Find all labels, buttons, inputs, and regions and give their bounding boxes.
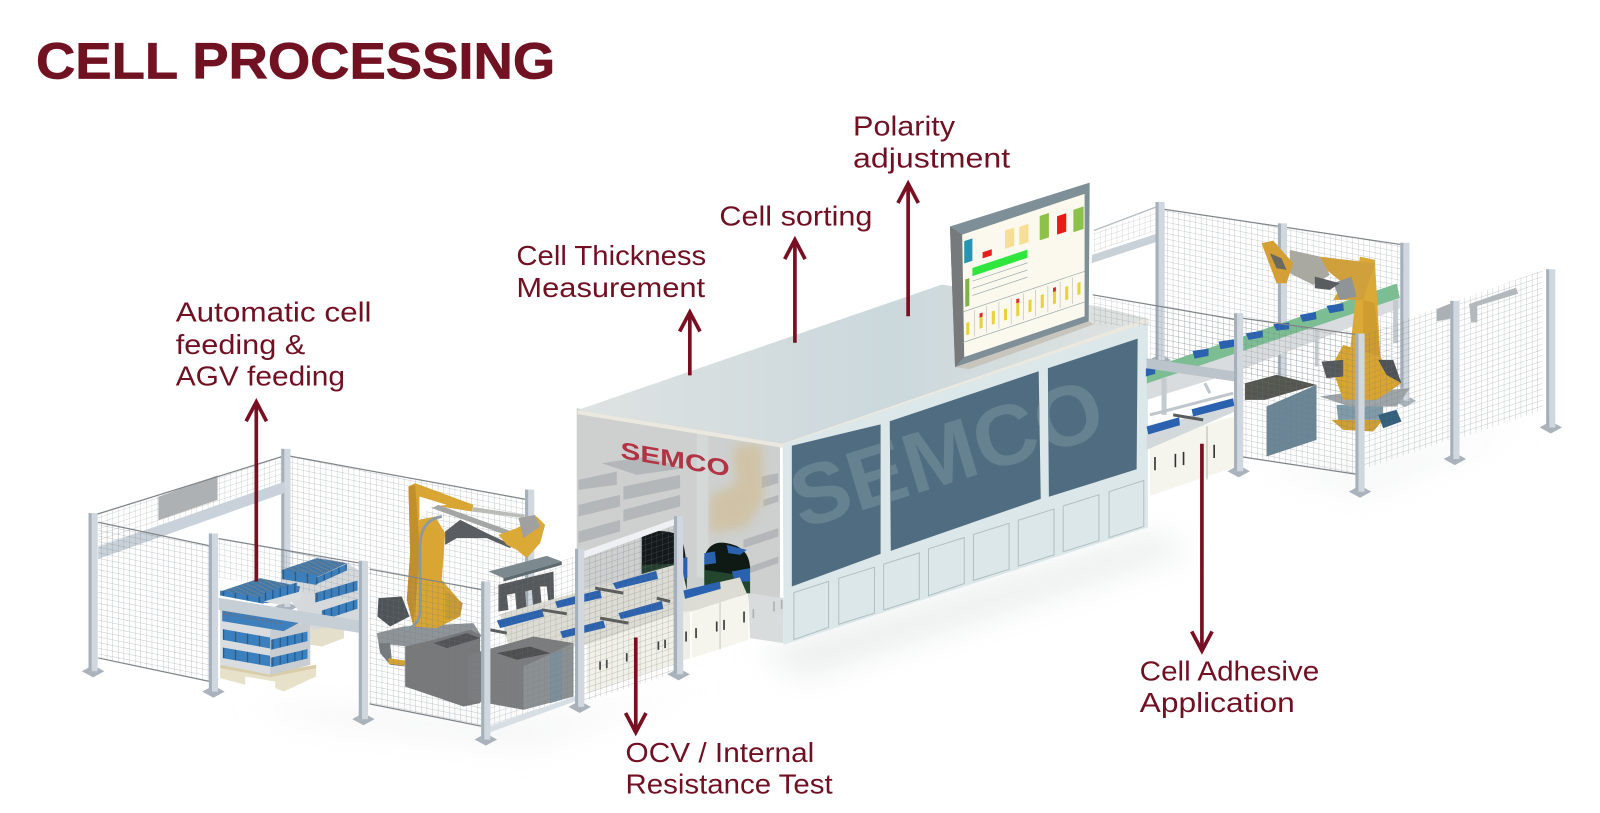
arrow: polarity xyxy=(898,184,918,316)
gray bin right xyxy=(1245,375,1317,457)
label: polarity adjustment: Polarity xyxy=(853,111,955,142)
rear stack xyxy=(282,558,358,630)
arrow: automatic cell feeding xyxy=(246,402,267,581)
machine enclosure xyxy=(577,285,1150,645)
conveyor legs xyxy=(1162,378,1167,415)
arrow: cell sorting xyxy=(785,240,805,343)
end face reflections xyxy=(578,457,778,573)
label: OCV internal resistance test: Resistance Test xyxy=(626,769,833,800)
arrow: cell thickness xyxy=(680,312,700,375)
fence panel: left side xyxy=(98,522,209,681)
arrow: adhesive xyxy=(1192,444,1212,651)
cell clusters xyxy=(497,571,663,638)
robot 1 wrist xyxy=(498,517,545,558)
fence panel: left front with cross beam xyxy=(219,539,363,633)
front stack upper tier xyxy=(220,578,300,603)
right lane cells xyxy=(683,581,721,599)
front stack body xyxy=(220,607,310,675)
label: cell sorting: Cell sorting xyxy=(719,200,872,231)
title: CELL PROCESSING xyxy=(36,33,555,90)
robot 2 upper arm xyxy=(1320,257,1375,300)
fence panels: left front right xyxy=(370,518,677,732)
SEMCO logo on end face: SEMCO xyxy=(620,438,730,483)
label: polarity adjustment xyxy=(853,111,1011,173)
label: cell adhesive application: Application xyxy=(1140,687,1295,718)
robot 2 wrist xyxy=(1262,241,1293,283)
machine end face xyxy=(577,408,783,643)
label: automatic cell feeding xyxy=(176,296,372,392)
label: OCV internal resistance test: OCV / Internal xyxy=(626,737,814,768)
robot 2 base xyxy=(1332,345,1401,400)
robot 1 xyxy=(377,483,562,666)
label: cell adhesive application xyxy=(1140,655,1319,718)
left cell posts xyxy=(82,513,690,746)
label: cell thickness measurement xyxy=(516,240,706,303)
right cell posts xyxy=(1227,269,1562,498)
pallet stacks xyxy=(220,558,358,691)
arches xyxy=(642,531,687,600)
right front fences xyxy=(1243,270,1543,474)
label: cell thickness measurement: Cell Thickness xyxy=(516,240,706,271)
robot 1 motor xyxy=(377,596,409,626)
robot 2 xyxy=(1262,241,1410,432)
green conveyor xyxy=(1146,284,1400,415)
rear pallet xyxy=(309,621,344,646)
robot 2 tower xyxy=(1350,257,1381,360)
lower panels xyxy=(794,480,1144,640)
machine long face xyxy=(783,322,1148,645)
robot 2 pedestal xyxy=(1332,420,1383,432)
label: automatic cell feeding: AGV feeding xyxy=(176,361,345,392)
floor shadows xyxy=(245,428,1530,750)
robot 2 forearm xyxy=(1290,250,1330,285)
label: automatic cell feeding: Automatic cell xyxy=(176,296,372,327)
machine base box xyxy=(748,593,783,643)
conveyor surface xyxy=(500,563,747,653)
arrow: OCV test xyxy=(626,638,646,732)
label: cell thickness measurement: Measurement xyxy=(516,272,706,303)
machine top face xyxy=(578,285,1148,444)
label: automatic cell feeding: feeding & xyxy=(176,329,305,360)
label: polarity adjustment: adjustment xyxy=(853,142,1011,173)
label: cell adhesive application: Cell Adhesive xyxy=(1140,655,1319,686)
gray bins xyxy=(405,630,573,710)
right cabinets xyxy=(692,593,748,658)
conveyor cabinets, left part xyxy=(587,611,685,694)
robot 1 body xyxy=(407,483,473,628)
left cabinet handles xyxy=(600,640,665,670)
left cell: back fences xyxy=(94,449,541,654)
monitor xyxy=(950,183,1094,369)
monitor stand xyxy=(955,321,1094,369)
screen xyxy=(962,194,1085,357)
robot 1 links xyxy=(472,507,525,518)
SEMCO window watermark: SEMCO xyxy=(779,361,1115,548)
conveyor left xyxy=(490,563,748,694)
cells on green belt xyxy=(1146,303,1344,377)
cell trays xyxy=(490,588,670,645)
robot 1 base xyxy=(377,623,482,646)
right cell: back fences xyxy=(1092,202,1416,408)
robot 1 gripper xyxy=(498,571,554,613)
windows xyxy=(792,339,1138,587)
right lower conveyor and cabinets xyxy=(1147,398,1235,496)
label: OCV internal resistance test xyxy=(626,737,833,800)
front pallet xyxy=(220,666,316,691)
cross beam xyxy=(1147,358,1235,382)
